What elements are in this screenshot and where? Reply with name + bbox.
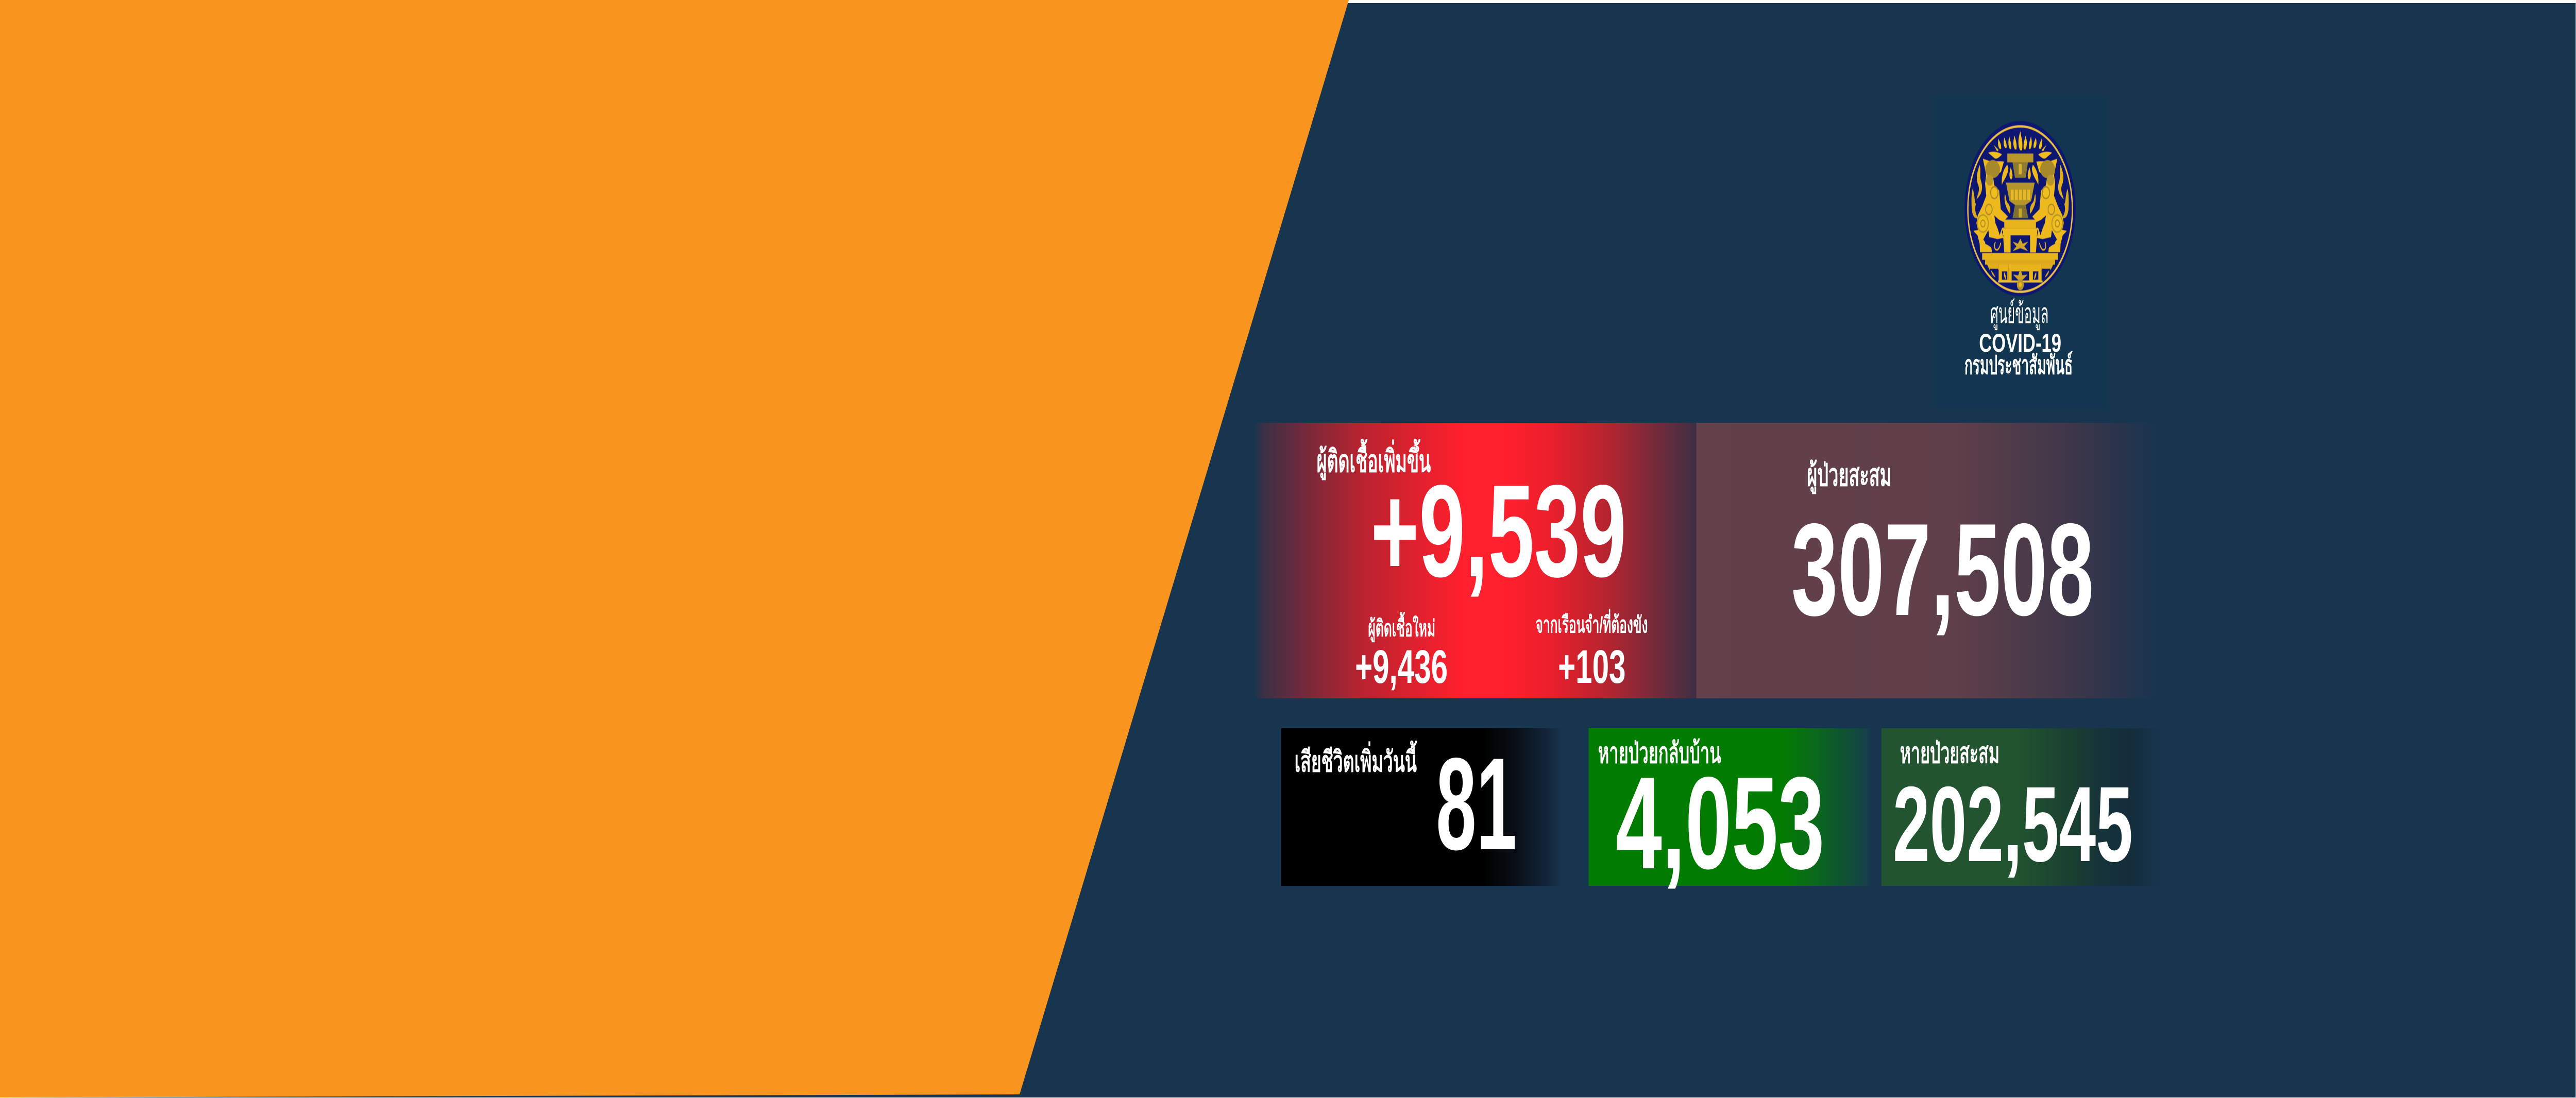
number: total new infections: +9,539 — [1370, 458, 1626, 605]
heading: cumulative recovered: หายป่วยสะสม — [1900, 737, 1999, 769]
number: from prisons: +103 — [1558, 640, 1625, 693]
panel: cumulative cases — [1696, 423, 2160, 698]
logo line: COVID-19: COVID-19 — [1979, 329, 2061, 357]
panel: new infections — [1254, 423, 1696, 698]
number: deaths today: 81 — [1436, 731, 1517, 878]
panel: recovered today — [1588, 728, 1872, 897]
panel: cumulative recovered — [1882, 728, 2162, 886]
logo line: department: กรมประชาสัมพันธ์ — [1964, 351, 2073, 380]
label: new cases: ผู้ติดเชื้อใหม่ — [1368, 611, 1435, 643]
logo block: COVID-19 information centre — [1936, 96, 2108, 409]
icon: government seal — [1964, 121, 2076, 296]
panel: deaths today — [1281, 728, 1562, 886]
orange wedge — [0, 0, 1349, 1097]
heading: deaths today: เสียชีวิตเพิ่มวันนี้ — [1295, 740, 1417, 778]
number: new cases: +9,436 — [1355, 640, 1448, 693]
heading: new infections: ผู้ติดเชื้อเพิ่มขึ้น — [1317, 438, 1431, 481]
label: from prisons: จากเรือนจำ/ที่ต้องขัง — [1536, 608, 1648, 638]
logo line: centre name: ศูนย์ข้อมูล — [1990, 298, 2048, 330]
heading: cumulative cases: ผู้ป่วยสะสม — [1807, 458, 1891, 494]
number: recovered today: 4,053 — [1616, 750, 1824, 897]
number: cumulative cases: 307,508 — [1791, 496, 2094, 643]
heading: recovered today: หายป่วยกลับบ้าน — [1598, 737, 1721, 769]
number: cumulative recovered: 202,545 — [1893, 764, 2133, 884]
